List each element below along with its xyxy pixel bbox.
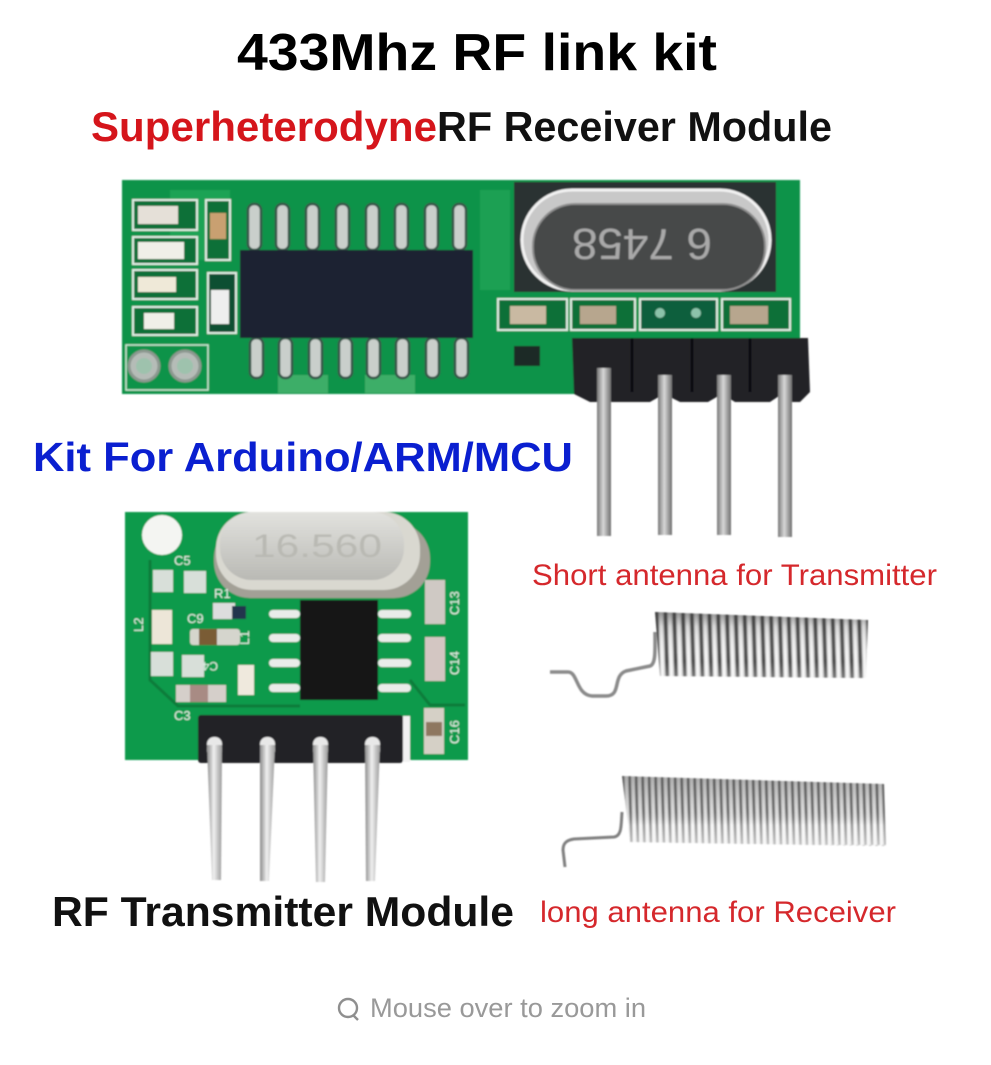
- transmitter board silk labels: C14: [447, 651, 462, 675]
- transmitter board silk labels: [131, 553, 462, 744]
- transmitter board silk labels: C3: [174, 708, 191, 723]
- subtitle: kit compatibility: Kit For Arduino/ARM/MCU: [33, 434, 573, 480]
- transmitter pin header: [198, 715, 410, 882]
- short antenna wire lead: [550, 632, 655, 696]
- label: long antenna: long antenna for Receiver: [540, 896, 896, 929]
- heading: receiver module: [91, 103, 832, 150]
- receiver crystal: 6 7458: [572, 219, 712, 268]
- short antenna spring: [550, 612, 868, 696]
- short antenna coil: [655, 612, 868, 678]
- transmitter board silk labels: L1: [237, 631, 252, 645]
- receiver SMD row: [498, 299, 790, 366]
- receiver module photo illustration: [122, 180, 810, 537]
- left SMD component column: [133, 200, 236, 335]
- long antenna spring: [563, 776, 886, 867]
- label: short antenna: Short antenna for Transmitter: [532, 559, 937, 592]
- receiver PCB board: [122, 180, 800, 394]
- receiver IC pins: [248, 204, 468, 378]
- long antenna wire lead: [563, 812, 622, 867]
- transmitter board silk labels: C5: [174, 553, 191, 568]
- transmitter crystal: 16.560: [252, 528, 382, 564]
- icon: magnifier: [339, 999, 358, 1020]
- transmitter board silk labels: C13: [447, 591, 462, 615]
- transmitter board silk labels: C4: [202, 659, 218, 673]
- title: 433Mhz RF link kit: [237, 24, 717, 82]
- receiver IC chip: [240, 250, 473, 338]
- heading part: Superheterodyne: Superheterodyne: [91, 103, 437, 150]
- receiver pin header: [572, 338, 810, 537]
- solder pad holes: [129, 351, 200, 381]
- long antenna coil: [622, 776, 886, 846]
- zoom hint: [339, 993, 646, 1023]
- transmitter SMD components: [151, 570, 445, 754]
- transmitter board silk labels: C9: [187, 611, 204, 626]
- transmitter board silk labels: R1: [214, 586, 231, 601]
- transmitter IC pins: [269, 610, 411, 692]
- transmitter mounting hole: [142, 515, 182, 555]
- transmitter module photo illustration: [125, 512, 468, 882]
- heading part: RF Receiver Module: RF Receiver Module: [437, 103, 832, 150]
- transmitter PCB board: [125, 512, 468, 760]
- transmitter crystal: [214, 512, 430, 598]
- receiver crystal: [514, 182, 776, 292]
- transmitter IC chip: [300, 600, 378, 700]
- transmitter board silk labels: L2: [131, 618, 146, 632]
- transmitter board silk labels: C16: [447, 720, 462, 744]
- zoom hint text: Mouse over to zoom in: [370, 993, 646, 1023]
- label: transmitter module: RF Transmitter Module: [52, 888, 514, 935]
